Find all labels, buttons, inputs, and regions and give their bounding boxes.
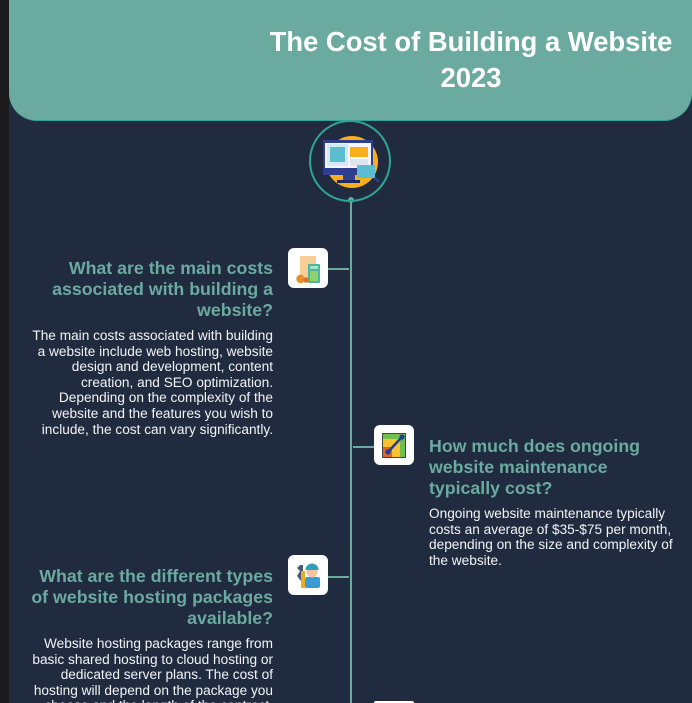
- section: website building costs: [32, 258, 274, 437]
- title: [270, 26, 672, 93]
- body text: design and development, content: [72, 359, 273, 374]
- title: The Cost of Building a Website: [270, 26, 672, 57]
- body text: Ongoing website maintenance typically: [429, 506, 665, 521]
- next icon box, cut off by page edge: [374, 701, 414, 703]
- timeline top dot: [348, 197, 354, 203]
- icon: website on monitor in circle: [309, 121, 391, 202]
- heading: website?: [197, 300, 273, 320]
- body text: the website.: [429, 553, 502, 568]
- body text: basic shared hosting to cloud hosting or: [32, 652, 273, 667]
- body text: [429, 506, 673, 568]
- body text: [32, 328, 273, 437]
- connector: item 3: [328, 576, 349, 578]
- icon: engineer with wrench: [288, 555, 328, 595]
- body text: Website hosting packages range from: [44, 636, 273, 651]
- icon: growth chart: [374, 425, 414, 465]
- timeline vertical line: [350, 199, 352, 703]
- heading: available?: [187, 608, 273, 628]
- heading: website maintenance: [429, 457, 608, 477]
- left page edge strip: [0, 0, 9, 703]
- icon: calculator and coins: [288, 248, 328, 288]
- body text: include, the cost can vary significantly.: [42, 422, 273, 437]
- heading: [52, 258, 274, 320]
- heading: What are the main costs: [69, 258, 273, 278]
- section: hosting packages: [31, 566, 273, 703]
- connector: item 1: [328, 268, 349, 270]
- heading: What are the different types: [39, 566, 273, 586]
- heading: [429, 436, 640, 498]
- body text: The main costs associated with building: [32, 328, 273, 343]
- heading: associated with building a: [52, 279, 273, 299]
- body text: website and the features you wish to: [52, 406, 273, 421]
- title: 2023: [441, 62, 501, 93]
- heading: [31, 566, 273, 628]
- heading: How much does ongoing: [429, 436, 640, 456]
- body text: costs an average of $35-$75 per month,: [429, 522, 671, 537]
- section: ongoing maintenance: [429, 436, 673, 568]
- heading: of website hosting packages: [31, 587, 273, 607]
- body text: depending on the size and complexity of: [429, 537, 673, 552]
- body text: dedicated server plans. The cost of: [61, 667, 273, 682]
- body text: hosting will depend on the package you: [34, 683, 273, 698]
- heading: typically cost?: [429, 478, 552, 498]
- body text: creation, and SEO optimization.: [81, 375, 273, 390]
- body text: Depending on the complexity of the: [59, 390, 273, 405]
- header banner: [9, 0, 692, 121]
- body text: a website include web hosting, website: [38, 344, 273, 359]
- connector: item 2: [353, 446, 374, 448]
- body text: [32, 636, 273, 703]
